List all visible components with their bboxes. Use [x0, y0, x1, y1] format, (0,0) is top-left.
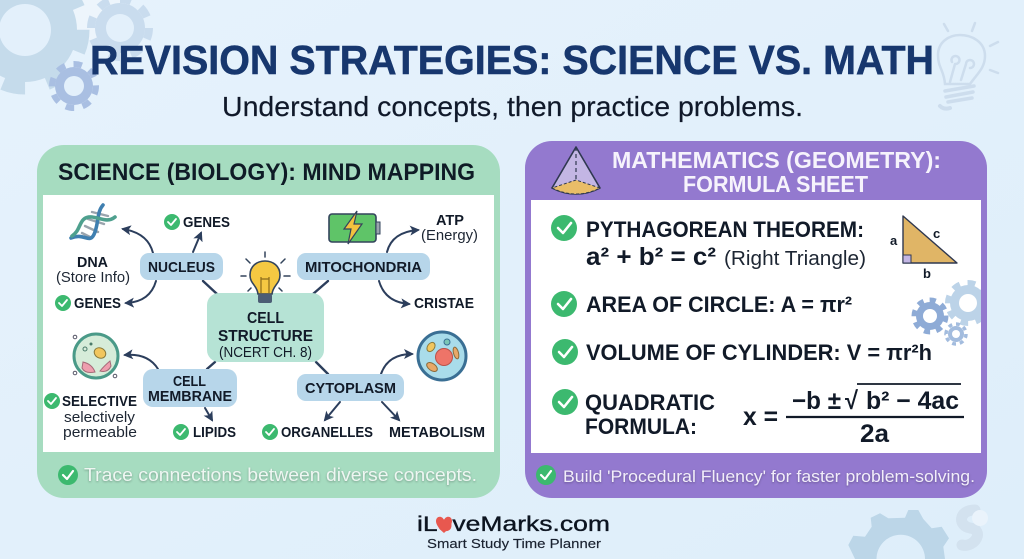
- formula: pythagorean theorem: a² + b² = c²: [586, 243, 716, 271]
- icon: plant cell: [73, 334, 118, 378]
- heading: mathematics: MATHEMATICS (GEOMETRY):: [612, 147, 941, 173]
- icon: battery: [329, 211, 380, 244]
- title: REVISION STRATEGIES: SCIENCE VS. MATH: [90, 37, 934, 83]
- formula: quadratic formula: b² − 4ac: [866, 387, 959, 415]
- diagram: right triangle: b: [923, 266, 931, 281]
- panel: mathematics formula sheet: [525, 141, 988, 498]
- diagram: right triangle: c: [933, 226, 940, 241]
- icon: cone: [552, 147, 600, 194]
- label: DNA: [56, 254, 130, 286]
- logo: [417, 513, 610, 551]
- icon: animal cell: [418, 332, 466, 380]
- diagram: right triangle: [890, 216, 957, 281]
- node: nucleus: [123, 229, 223, 303]
- label: organelles: ORGANELLES: [281, 424, 373, 441]
- node: cytoplasm: [297, 354, 412, 420]
- label: selective: [44, 393, 137, 441]
- formula: quadratic formula: 2a: [860, 420, 890, 448]
- node: cell structure: (NCERT CH. 8): [219, 344, 312, 361]
- node: nucleus: NUCLEUS: [148, 259, 215, 276]
- logo: iLoveMarks.com: [417, 513, 610, 536]
- icon: heart: [436, 517, 452, 533]
- label: metabolism: METABOLISM: [389, 424, 485, 441]
- formula: pythagorean theorem: PYTHAGOREAN THEOREM:: [586, 217, 864, 242]
- node: cell structure: [207, 293, 324, 362]
- formula: quadratic formula: −b ±: [792, 387, 841, 415]
- node: cell membrane: MEMBRANE: [148, 388, 232, 405]
- formula: quadratic formula: FORMULA:: [585, 414, 697, 439]
- panel: science mind map: [37, 145, 500, 498]
- label: genes lower: [55, 295, 121, 312]
- node: cytoplasm: CYTOPLASM: [305, 380, 396, 397]
- background gears top-left: [0, 0, 149, 108]
- label: selective: selectively: [64, 409, 136, 426]
- heading: mathematics: FORMULA SHEET: [683, 171, 868, 197]
- label: genes lower: GENES: [74, 295, 121, 312]
- label: selective: SELECTIVE: [62, 393, 137, 410]
- label: DNA: DNA: [77, 254, 108, 271]
- icon: DNA helix: [71, 205, 115, 238]
- node: mitochondria: MITOCHONDRIA: [305, 259, 422, 276]
- formula: pythagorean theorem: [551, 215, 866, 271]
- tagline: Smart Study Time Planner: [427, 536, 602, 551]
- formula: quadratic formula: QUADRATIC: [585, 390, 715, 415]
- formula: area of circle: AREA OF CIRCLE: A = πr²: [586, 292, 852, 317]
- label: cristae: CRISTAE: [414, 295, 474, 312]
- label: ATP: [421, 212, 478, 244]
- icon: background light bulb: [938, 23, 998, 109]
- node: cell structure: CELL: [247, 310, 284, 327]
- subtitle: Understand concepts, then practice problems.: [222, 91, 803, 122]
- footer: science tip: Trace connections between diverse concepts.: [84, 465, 477, 485]
- diagram: right triangle: a: [890, 233, 898, 248]
- label: genes top: GENES: [183, 214, 230, 231]
- formula: quadratic formula: x =: [743, 403, 778, 431]
- background gears bottom-right: [848, 510, 988, 559]
- node: mitochondria: [297, 230, 430, 304]
- footer: math tip: Build 'Procedural Fluency' for faster problem-solving.: [563, 467, 975, 486]
- node: cell membrane: CELL: [173, 373, 206, 390]
- formula: quadratic formula: [552, 384, 964, 448]
- heading: mathematics: [612, 147, 941, 197]
- node: cell membrane: [125, 355, 237, 420]
- icon: light bulb: [241, 252, 290, 303]
- label: selective: permeable: [63, 424, 137, 441]
- formula: quadratic formula: √: [845, 387, 858, 415]
- formula: pythagorean theorem: (Right Triangle): [724, 248, 866, 270]
- label: genes top: [164, 214, 230, 231]
- label: lipids: LIPIDS: [193, 424, 236, 441]
- connectors between central node and branches: [203, 281, 328, 374]
- formula: volume of cylinder: VOLUME OF CYLINDER: V = πr²h: [586, 340, 932, 365]
- node: cell structure: STRUCTURE: [218, 328, 313, 345]
- heading: science: SCIENCE (BIOLOGY): MIND MAPPING: [58, 159, 475, 186]
- label: lipids: [173, 424, 236, 441]
- label: ATP: ATP: [436, 212, 464, 229]
- icon: decorative gears in panel: [914, 283, 988, 344]
- label: ATP: (Energy): [421, 227, 478, 244]
- label: DNA: (Store Info): [56, 269, 130, 286]
